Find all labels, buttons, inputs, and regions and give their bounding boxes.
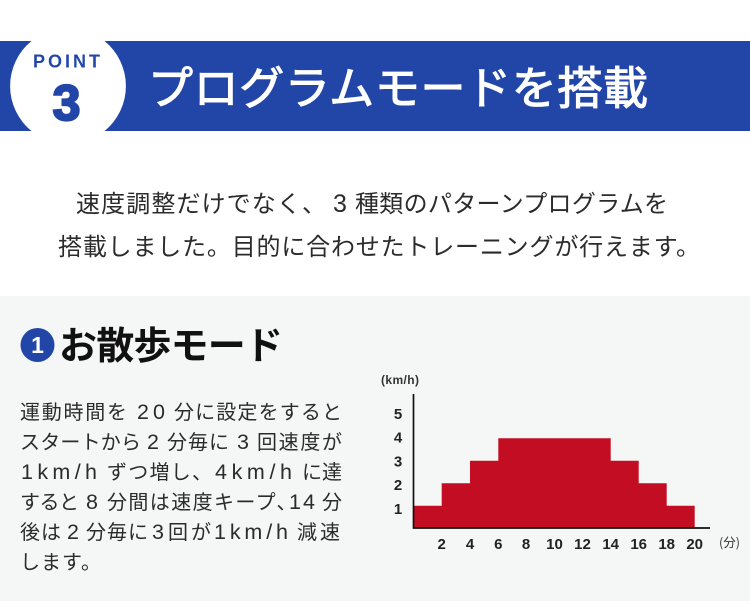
intro text: 3 [333,190,347,218]
x axis labels [438,536,703,553]
description text: 20 [137,400,165,424]
x axis labels: 16 [630,536,647,553]
point badge: POINT [33,52,100,72]
y axis labels [394,406,403,518]
section heading [20,315,283,370]
description text: 運動時間を [20,396,127,425]
title: プログラムモードを搭載 [148,52,648,117]
x axis labels: 18 [658,536,675,553]
description text: 減速 [297,516,340,545]
description text: 1km/h [214,520,288,544]
intro text [58,184,700,262]
y axis labels: 1 [394,501,402,518]
panel: walk mode [0,296,750,601]
description text: 8 [86,490,98,514]
description text: 分毎に [86,516,148,545]
description text: 後は [20,516,61,545]
x axis labels: 2 [438,536,446,553]
description text: に達 [302,456,342,485]
x axis labels: 14 [602,536,620,553]
icon: number 1 badge [20,328,54,362]
heading text: お散歩モード [59,315,283,370]
point badge: 3 [53,75,80,131]
x axis labels: 12 [574,536,591,553]
intro text: 種類のパターンプログラムを [355,184,668,219]
x axis labels: 10 [546,536,563,553]
description text: 分に設定をすると [174,396,342,425]
description text: 分毎に [167,426,229,455]
description text: 14 [289,490,315,514]
description text: スタートから [20,426,141,455]
y axis labels: 3 [394,454,402,470]
description text: 回速度が [257,426,342,455]
x axis labels: 4 [466,536,475,553]
y axis labels: 2 [394,477,402,494]
y axis labels: 5 [394,406,402,423]
x axis labels: 8 [522,536,530,553]
step chart [381,373,740,553]
description text: 分 [322,486,342,515]
intro text: 速度調整だけでなく、 [76,184,326,219]
description text: します。 [20,546,101,575]
description text: ずつ増し、 [107,456,212,485]
description text: 2 [147,430,159,454]
description text: 分間は速度キープ､ [107,486,287,515]
description text [20,396,342,575]
description text: 4km/h [215,460,292,484]
axes [414,394,710,528]
y axis labels: 4 [394,430,403,446]
description text: すると [20,486,79,515]
x axis labels: 6 [494,536,502,553]
description text: 3 [237,430,249,454]
header banner [0,41,750,131]
description text: 回が [168,516,211,545]
intro text: 搭載しました。目的に合わせたトレーニングが行えます。 [58,227,700,262]
unit label: speed: (km/h) [381,373,419,387]
description text: 3 [152,520,164,544]
icon: number 1 badge: 1 [31,332,44,358]
unit label: minutes: (分) [719,532,740,551]
description text: 1km/h [21,460,97,484]
red speed area [414,438,695,528]
x axis labels: 20 [686,536,703,553]
point badge [10,41,126,131]
description text: 2 [67,520,79,544]
